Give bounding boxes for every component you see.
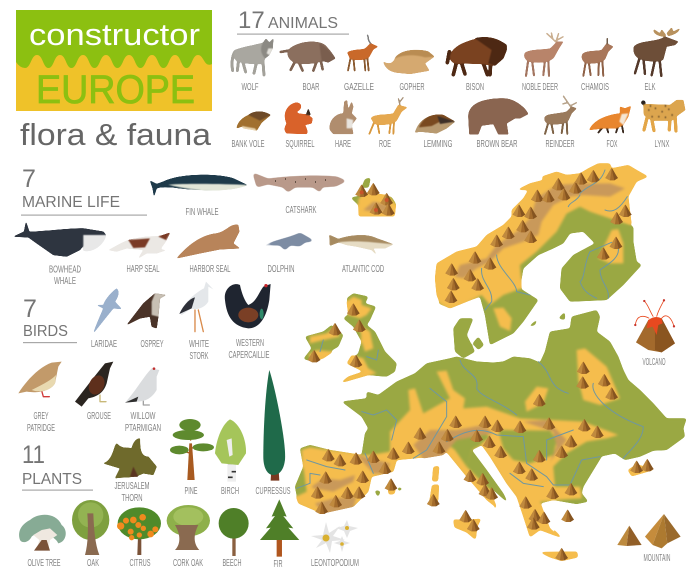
plant: citrus: CITRUS — [130, 558, 151, 569]
animal: chamois: CHAMOIS — [581, 82, 609, 93]
animal: roe — [369, 97, 407, 150]
animal: reindeer — [544, 96, 577, 150]
bird: osprey — [127, 293, 166, 350]
animal: brown bear: BROWN BEAR — [476, 139, 518, 150]
bird: western capercaillie: WESTERN — [236, 338, 264, 349]
plant: jerusalem thorn: THORN — [122, 493, 142, 504]
heading: 11 plants: PLANTS — [22, 471, 82, 488]
icon: mountains — [617, 514, 681, 564]
animal: squirrel: SQUIRREL — [286, 139, 315, 150]
plant: cupressus: CUPRESSUS — [256, 486, 291, 497]
plant: fir: FIR — [274, 559, 282, 570]
animal: noble deer — [522, 33, 563, 93]
animal: bank vole — [232, 112, 271, 150]
marine: dolphin — [258, 233, 314, 275]
heading: 17 animals — [237, 7, 349, 35]
plant: birch — [215, 419, 246, 497]
animal: boar: BOAR — [302, 82, 320, 93]
animal: gopher — [383, 50, 434, 93]
marine: atlantic cod — [329, 235, 393, 275]
animal: fox: FOX — [606, 139, 618, 150]
title block: constructor Europe: constructor — [29, 17, 200, 52]
plant: cupressus — [256, 370, 291, 497]
bird: osprey: OSPREY — [140, 339, 164, 350]
icon: volcano: VOLCANO — [642, 357, 666, 368]
plant: leontopodium — [311, 520, 359, 569]
heading: 11 plants — [22, 441, 93, 491]
bird: grey partridge: GREY — [34, 411, 49, 422]
bird: willow ptarmigan — [125, 367, 161, 434]
animal: gazelle: GAZELLE — [344, 82, 374, 93]
animal: lemming: LEMMING — [424, 139, 453, 150]
animal: roe: ROE — [379, 139, 391, 150]
animal: lynx — [641, 100, 685, 150]
bird: grey partridge — [18, 362, 62, 434]
map: Iceland — [351, 178, 397, 216]
marine: dolphin: DOLPHIN — [268, 264, 294, 275]
bird: white stork: STORK — [190, 351, 209, 362]
bird: white stork: WHITE — [189, 339, 209, 350]
animal: hare: HARE — [335, 139, 351, 150]
animal: bison — [447, 37, 507, 93]
animal: reindeer: REINDEER — [546, 139, 574, 150]
bird: grouse — [75, 362, 113, 422]
animal: brown bear — [468, 98, 528, 150]
plant: citrus — [117, 507, 161, 569]
map: Britain and Ireland — [303, 293, 397, 383]
marine: harbor seal: HARBOR SEAL — [190, 264, 231, 275]
plant: oak: OAK — [87, 558, 99, 569]
heading: 7 marine life: MARINE LIFE — [22, 194, 120, 211]
plant: fir — [260, 499, 299, 570]
heading: 17 animals: ANIMALS — [268, 15, 338, 32]
marine: harp seal — [108, 233, 170, 275]
subtitle: flora and fauna: flora & fauna — [20, 117, 212, 152]
marine: harbor seal — [177, 225, 240, 275]
heading: 7 birds: BIRDS — [23, 323, 68, 340]
title block: constructor Europe — [16, 10, 212, 112]
plant: oak — [72, 500, 109, 569]
marine: fin whale: FIN WHALE — [186, 207, 219, 218]
heading: 7 birds: 7 — [23, 295, 37, 323]
bird: grouse: GROUSE — [87, 411, 111, 422]
plant: jerusalem thorn: JERUSALEM — [114, 481, 150, 492]
heading: 17 animals: 17 — [238, 7, 265, 34]
plant: leontopodium: LEONTOPODIUM — [311, 558, 359, 569]
marine: harp seal: HARP SEAL — [126, 264, 160, 275]
bird: willow ptarmigan: WILLOW — [130, 411, 156, 422]
bird: laridae — [91, 288, 122, 350]
animal: squirrel — [285, 103, 315, 150]
plant: beech: BEECH — [222, 558, 242, 569]
plant: birch: BIRCH — [221, 486, 239, 497]
bird: laridae: LARIDAE — [91, 339, 117, 350]
plant: cork oak — [167, 505, 210, 569]
plant: pine: PINE — [184, 486, 198, 497]
animal: gopher: GOPHER — [400, 82, 424, 93]
animal: fox — [589, 106, 631, 150]
bird: western capercaillie: CAPERCAILLIE — [228, 350, 270, 361]
icon: volcano — [634, 299, 675, 368]
map: Mediterranean islands and Crimea — [374, 459, 656, 561]
icon: mountains: MOUNTAIN — [644, 553, 670, 564]
plant: pine — [170, 419, 214, 497]
plant: olive tree — [19, 515, 66, 569]
animal: elk: ELK — [644, 82, 656, 93]
animal: boar — [281, 42, 335, 93]
animal: lynx: LYNX — [654, 139, 670, 150]
marine: atlantic cod: ATLANTIC COD — [342, 264, 384, 275]
marine: bowhead whale: BOWHEAD — [49, 264, 81, 276]
animal: hare — [330, 100, 357, 150]
heading: 7 marine life: 7 — [22, 165, 36, 193]
marine: fin whale — [150, 175, 247, 218]
heading: 7 birds — [23, 295, 77, 343]
animal: elk — [634, 27, 680, 93]
animal: bison: BISON — [466, 82, 484, 93]
plant: cork oak: CORK OAK — [173, 558, 203, 569]
bird: white stork — [179, 282, 213, 362]
animal: wolf: WOLF — [242, 82, 258, 93]
animal: wolf — [232, 39, 273, 93]
heading: 7 marine life — [21, 165, 147, 216]
animal: gazelle — [344, 35, 378, 93]
map: continental Europe — [295, 310, 687, 538]
marine: catshark: CATSHARK — [286, 205, 317, 216]
marine: bowhead whale: WHALE — [54, 276, 76, 287]
bird: grey partridge: PATRIDGE — [27, 423, 55, 434]
bird: western capercaillie — [225, 284, 271, 361]
plant: olive tree: OLIVE TREE — [28, 558, 61, 569]
heading: 11 plants: 11 — [22, 441, 45, 469]
marine: bowhead whale — [13, 222, 106, 287]
animal: lemming — [415, 115, 455, 150]
marine: catshark — [253, 173, 346, 216]
plant: beech — [219, 508, 249, 569]
title block: constructor Europe: EUROPE — [36, 68, 195, 112]
plant: jerusalem thorn — [103, 438, 157, 504]
map: Scandinavia — [435, 163, 648, 358]
bird: willow ptarmigan: PTARMIGAN — [125, 423, 161, 434]
animal: noble deer: NOBLE DEER — [522, 82, 558, 93]
animal: chamois — [581, 38, 613, 93]
animal: bank vole: BANK VOLE — [232, 139, 265, 150]
